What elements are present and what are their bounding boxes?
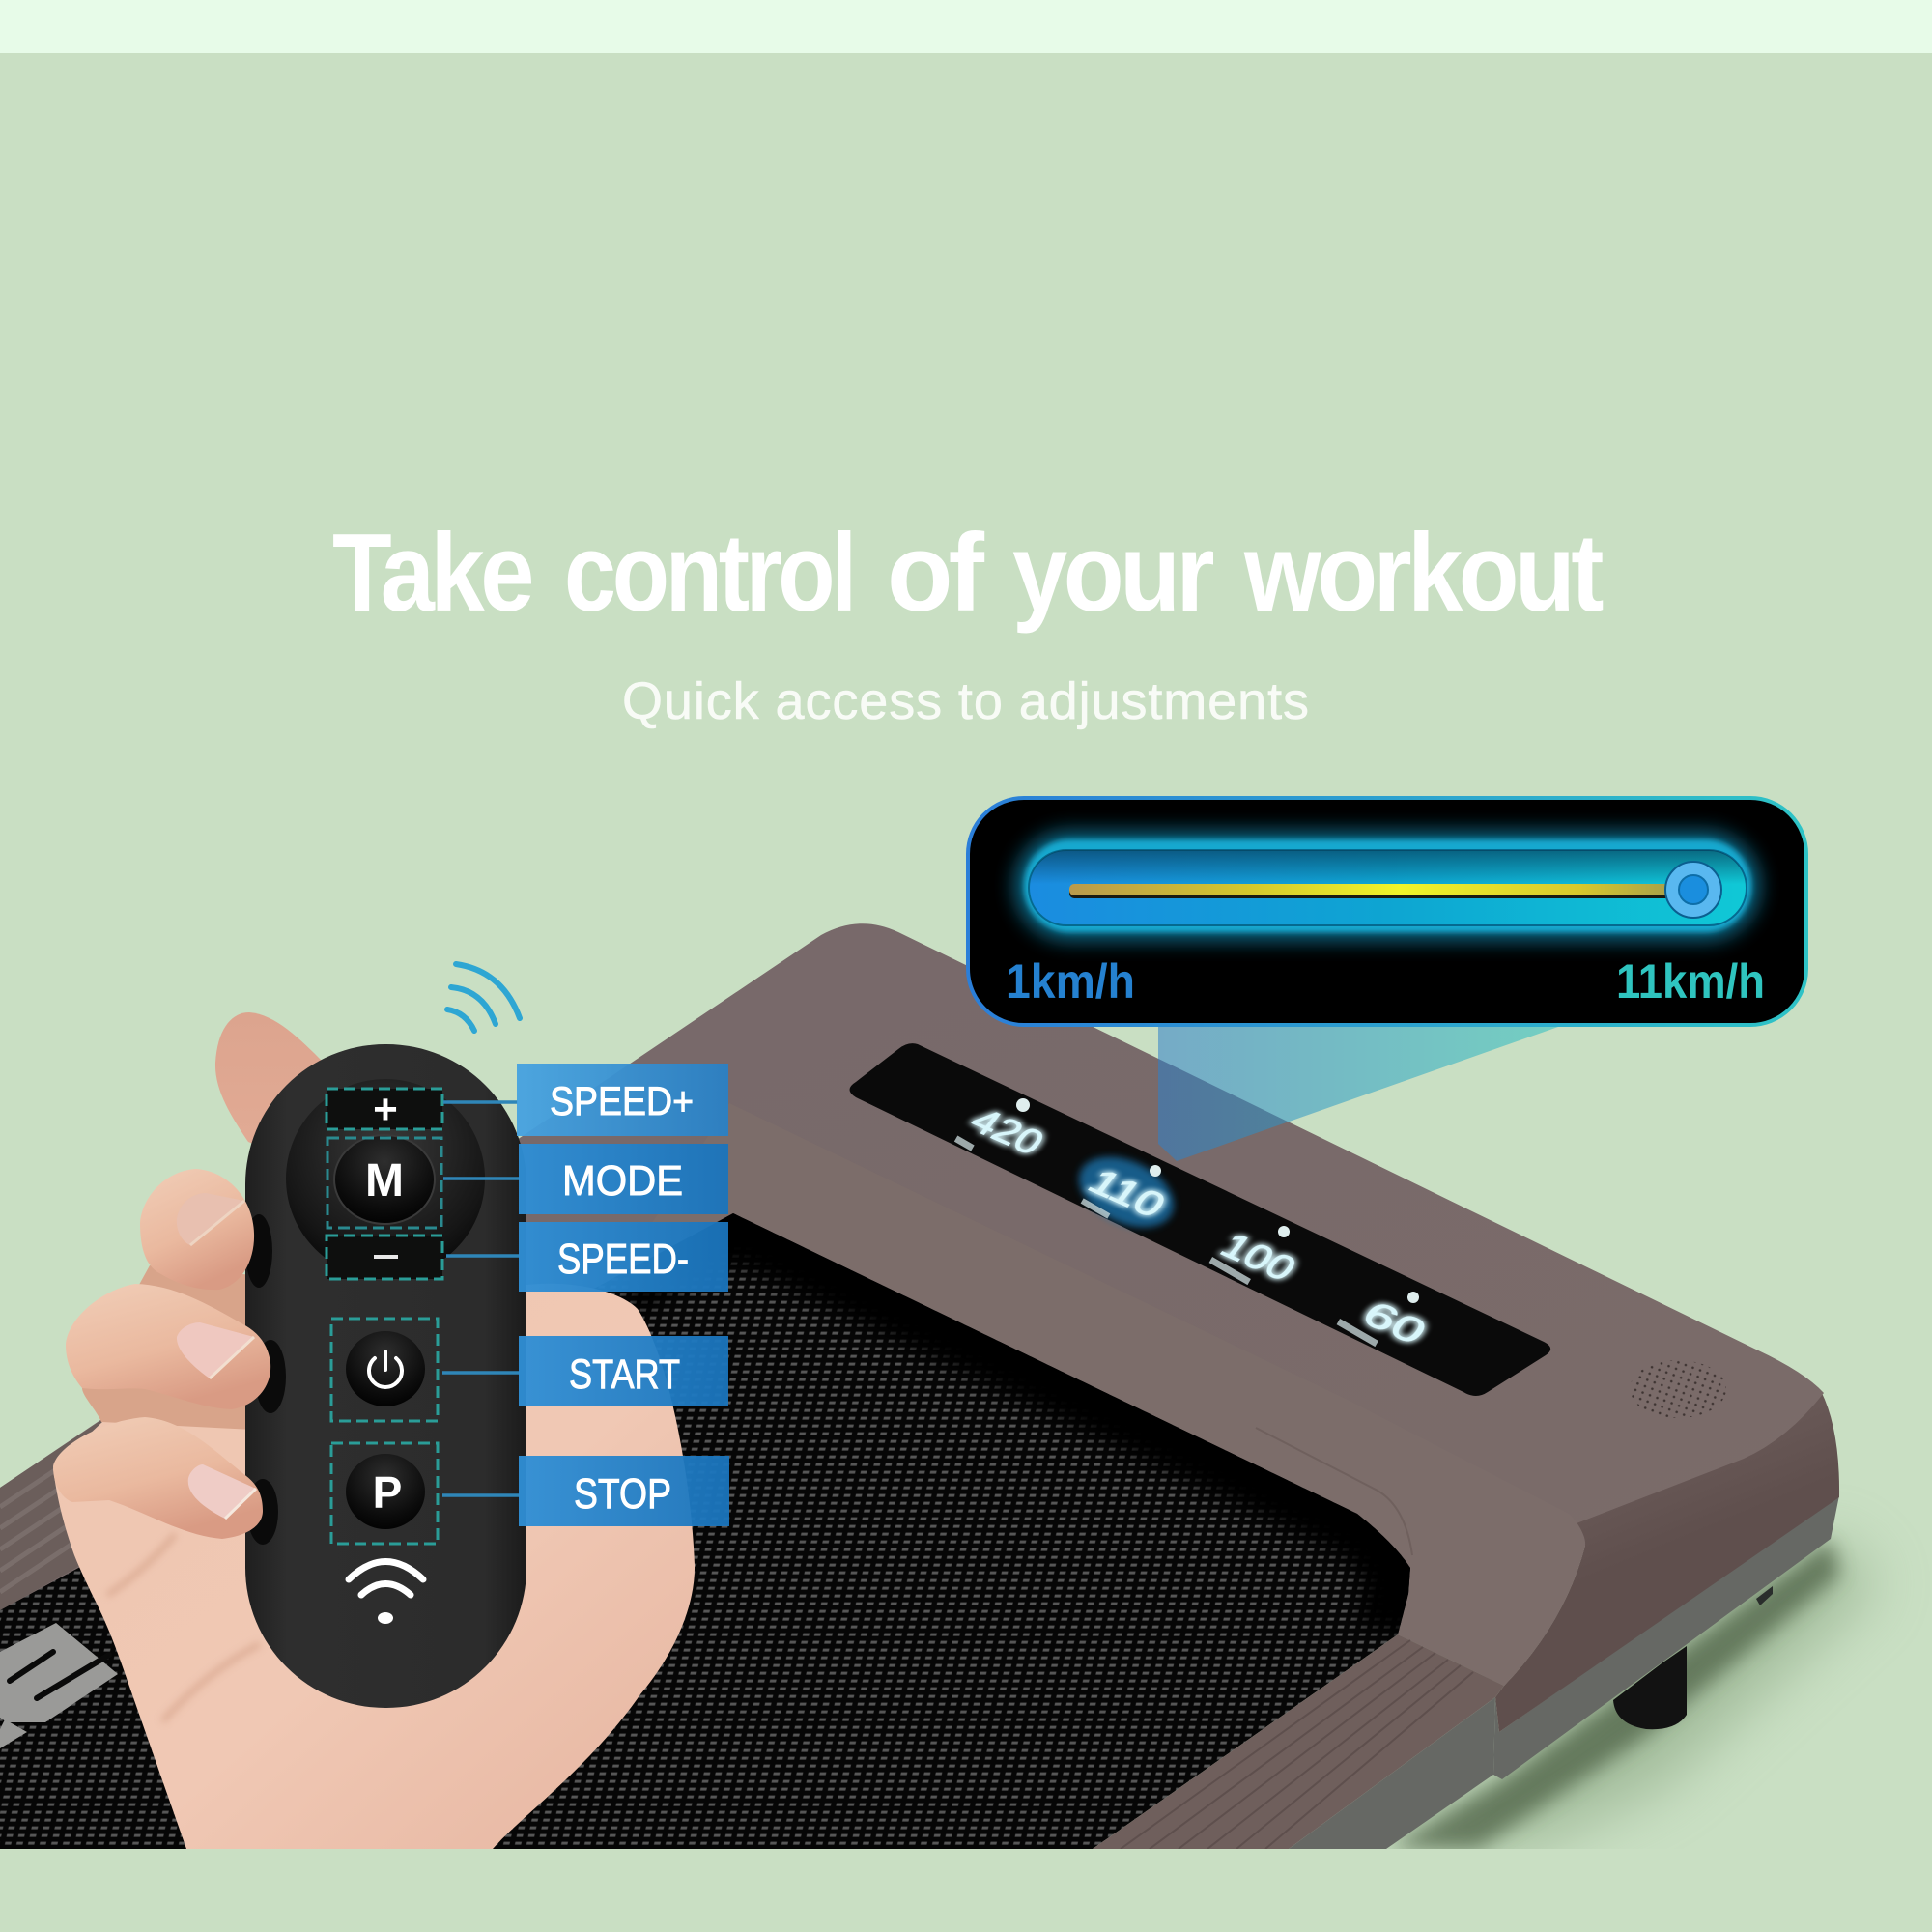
thumb top xyxy=(215,1012,321,1144)
active readout glow xyxy=(1074,1151,1179,1233)
speed panel xyxy=(968,798,1806,1025)
label: start xyxy=(519,1336,728,1406)
title: of xyxy=(887,512,985,635)
P button xyxy=(331,1443,438,1544)
fingers xyxy=(53,1169,270,1539)
P button: P xyxy=(373,1467,402,1518)
brown body front xyxy=(1495,1391,1839,1732)
index finger xyxy=(140,1169,254,1290)
readout 100: 100 xyxy=(1212,1226,1305,1289)
M dashed box xyxy=(327,1138,441,1228)
projection beam xyxy=(1158,1027,1558,1161)
palm xyxy=(53,1284,695,1849)
label: mode: MODE xyxy=(562,1157,683,1205)
wireless signal icon xyxy=(447,964,520,1031)
frame crease xyxy=(1256,1428,1412,1555)
readout 60: 60 xyxy=(1354,1293,1435,1351)
plus button xyxy=(327,1086,442,1133)
wifi icon xyxy=(349,1561,423,1624)
grey base xyxy=(1493,1495,1839,1779)
floor shadow xyxy=(1386,1536,1879,1849)
subtitle: Quick access to adjustments xyxy=(622,672,1309,730)
readout 420: 420 xyxy=(962,1100,1053,1162)
label: stop xyxy=(519,1456,729,1526)
belt shade xyxy=(618,1213,1410,1634)
M button xyxy=(334,1135,435,1224)
belt mesh xyxy=(0,1213,1410,1849)
M button: M xyxy=(365,1155,404,1207)
track outer glow xyxy=(1014,831,1760,941)
title xyxy=(332,512,1604,635)
hand behind remote xyxy=(53,1012,695,1849)
readout small icons xyxy=(1016,1098,1419,1303)
slider knob xyxy=(1665,862,1721,918)
connector lines xyxy=(442,1102,520,1495)
track glow ring xyxy=(1024,839,1751,932)
title: your xyxy=(1012,512,1213,635)
left rail xyxy=(0,1420,102,1609)
label: speed plus xyxy=(517,1064,728,1136)
title: control xyxy=(564,512,853,635)
brown top surface xyxy=(0,923,1824,1686)
side connector xyxy=(1756,1586,1773,1605)
treadmill xyxy=(0,923,1879,1849)
leg xyxy=(1613,1646,1687,1729)
readout captions xyxy=(954,1136,1378,1347)
minus button xyxy=(327,1236,442,1279)
label: speed minus: SPEED- xyxy=(557,1236,689,1283)
track xyxy=(1029,850,1747,925)
label: speed plus: SPEED+ xyxy=(550,1078,694,1123)
max speed: 11km/h xyxy=(1616,954,1765,1009)
frame inner band xyxy=(1398,1522,1585,1686)
readout 110: 110 xyxy=(1080,1161,1175,1225)
space between fingers xyxy=(82,1265,253,1430)
remote body xyxy=(245,1044,526,1708)
power button xyxy=(331,1319,438,1421)
top pale strip xyxy=(0,0,1932,53)
ribbed side rail xyxy=(1093,1634,1504,1849)
label: speed minus xyxy=(519,1222,728,1292)
label: mode xyxy=(519,1144,728,1214)
remote control xyxy=(245,1044,526,1708)
plus button: + xyxy=(373,1086,398,1133)
slider fill xyxy=(1069,886,1670,898)
logo fragment xyxy=(0,1623,118,1748)
rail grey side xyxy=(1289,1697,1495,1849)
palm creases xyxy=(109,1536,258,1719)
min speed: 1km/h xyxy=(1006,954,1135,1009)
dial xyxy=(286,1079,485,1278)
display panel xyxy=(850,1043,1550,1396)
label: start: START xyxy=(569,1351,680,1398)
title: Take xyxy=(332,512,531,635)
ring finger xyxy=(53,1417,263,1539)
title: workout xyxy=(1243,512,1604,635)
speaker grille xyxy=(1630,1360,1726,1418)
label: stop: STOP xyxy=(574,1470,671,1518)
finger contact shadows xyxy=(245,1214,286,1545)
middle finger xyxy=(66,1284,270,1409)
